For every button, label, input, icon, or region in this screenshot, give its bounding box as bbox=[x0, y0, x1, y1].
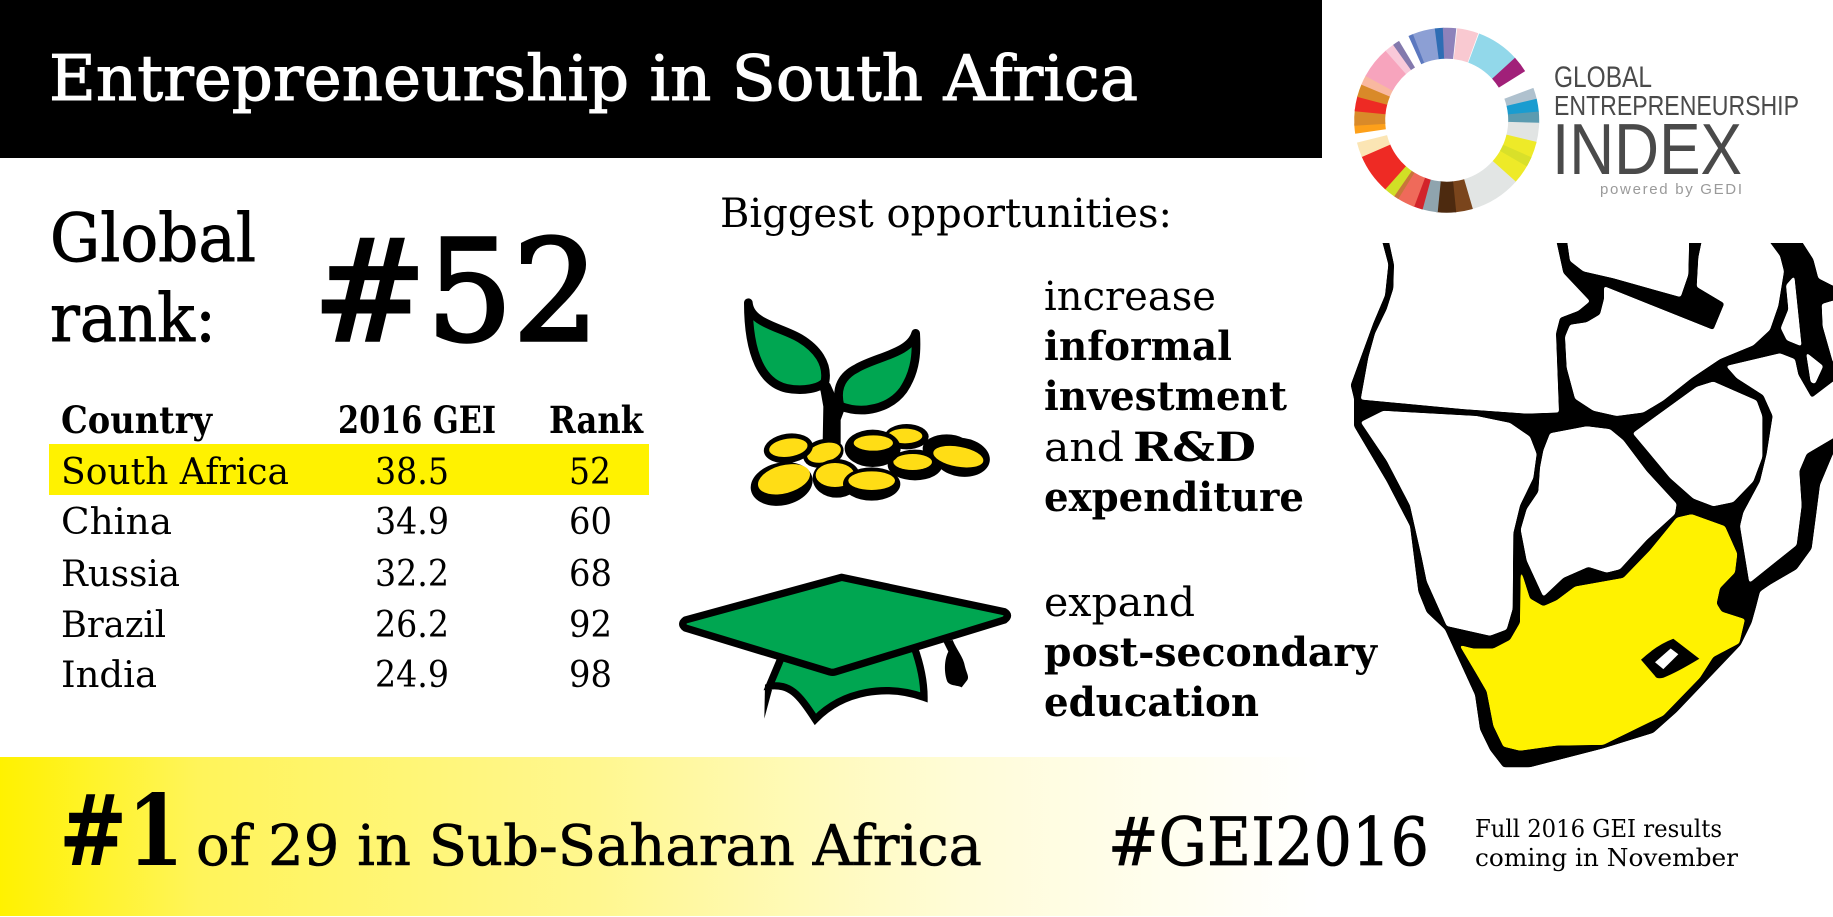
text: post-secondary education bbox=[1044, 580, 1379, 726]
highlighted row: South Africa: 52 bbox=[569, 452, 611, 493]
row: India: 98 bbox=[569, 655, 612, 696]
highlighted row: South Africa: South Africa bbox=[61, 452, 289, 493]
global rank bbox=[50, 200, 599, 374]
heading: biggest opportunities: Biggest opportunities: bbox=[720, 191, 1172, 237]
text: informal investment: informal bbox=[1044, 323, 1232, 370]
text: informal investment: R&D bbox=[1133, 424, 1256, 471]
row: Brazil: Brazil bbox=[61, 605, 166, 646]
cap left point bbox=[764, 684, 772, 719]
table header: 2016 GEI bbox=[338, 398, 496, 442]
highlighted row: South Africa bbox=[49, 444, 649, 495]
table header bbox=[61, 398, 644, 442]
row: India: 24.9 bbox=[375, 655, 449, 696]
icon: graduation cap bbox=[683, 577, 1007, 719]
rank number: #52 bbox=[313, 211, 599, 374]
logo wordmark: INDEX bbox=[1552, 110, 1742, 190]
logo ring bbox=[1338, 11, 1555, 229]
row: Russia bbox=[61, 554, 612, 595]
logo wordmark bbox=[1552, 61, 1799, 198]
results note: Full 2016 GEI results bbox=[1475, 815, 1722, 843]
row: Brazil: 26.2 bbox=[375, 605, 449, 646]
text: informal investment: expenditure bbox=[1044, 474, 1304, 521]
logo wordmark: powered by GEDI bbox=[1600, 181, 1742, 198]
regional rank: #1 bbox=[59, 774, 184, 889]
table header: Rank bbox=[549, 398, 644, 442]
row: Russia: Russia bbox=[61, 554, 180, 595]
row: Russia: 32.2 bbox=[375, 554, 449, 595]
row: Brazil: 92 bbox=[569, 605, 612, 646]
title bar bbox=[0, 0, 1322, 158]
row: India bbox=[61, 655, 612, 696]
map outline bbox=[1351, 233, 1833, 767]
text: post-secondary education: post-secondary bbox=[1044, 629, 1379, 676]
South Africa bbox=[1459, 514, 1745, 751]
text: informal investment: and bbox=[1044, 425, 1124, 471]
highlighted row: South Africa: 38.5 bbox=[375, 452, 449, 493]
bottom banner bbox=[0, 757, 1739, 916]
text: post-secondary education: expand bbox=[1044, 580, 1195, 626]
text: informal investment: investment bbox=[1044, 373, 1288, 420]
global rank label: Global bbox=[50, 200, 256, 277]
row: India: India bbox=[61, 655, 157, 696]
results note bbox=[1475, 815, 1739, 872]
hashtag: #GEI2016 bbox=[1108, 804, 1429, 881]
left leaf bbox=[748, 303, 826, 390]
plant stem bbox=[817, 378, 845, 443]
coins bbox=[747, 424, 992, 511]
row: China: China bbox=[61, 502, 172, 543]
logo wordmark: GLOBAL bbox=[1554, 61, 1652, 94]
global rank label: rank: bbox=[50, 280, 216, 357]
row: China: 60 bbox=[569, 502, 612, 543]
icon: plant growing from coins bbox=[747, 303, 992, 511]
regional rank bbox=[59, 774, 982, 889]
text: post-secondary education: education bbox=[1044, 679, 1259, 726]
row: Russia: 68 bbox=[569, 554, 612, 595]
neighbouring countries bbox=[1361, 233, 1833, 636]
right leaf bbox=[839, 333, 916, 410]
row: China: 34.9 bbox=[375, 502, 449, 543]
results note: coming in November bbox=[1475, 844, 1739, 872]
Lesotho bbox=[1641, 639, 1699, 678]
logo: Global Entrepreneurship Index bbox=[1338, 11, 1799, 229]
tassel bbox=[943, 640, 968, 687]
ranking table bbox=[49, 398, 649, 696]
mortarboard bbox=[683, 577, 1007, 672]
map of southern Africa bbox=[1351, 233, 1833, 767]
regional rank: of 29 in Sub-Saharan Africa bbox=[196, 814, 982, 879]
text: informal investment bbox=[1044, 274, 1304, 521]
row: Brazil bbox=[61, 605, 612, 646]
text: informal investment: increase bbox=[1044, 274, 1216, 320]
global rank label bbox=[50, 200, 256, 357]
cap base bbox=[769, 647, 924, 719]
table header: Country bbox=[61, 398, 213, 442]
title: Entrepreneurship in South Africa bbox=[49, 42, 1138, 115]
row: China bbox=[61, 502, 612, 543]
